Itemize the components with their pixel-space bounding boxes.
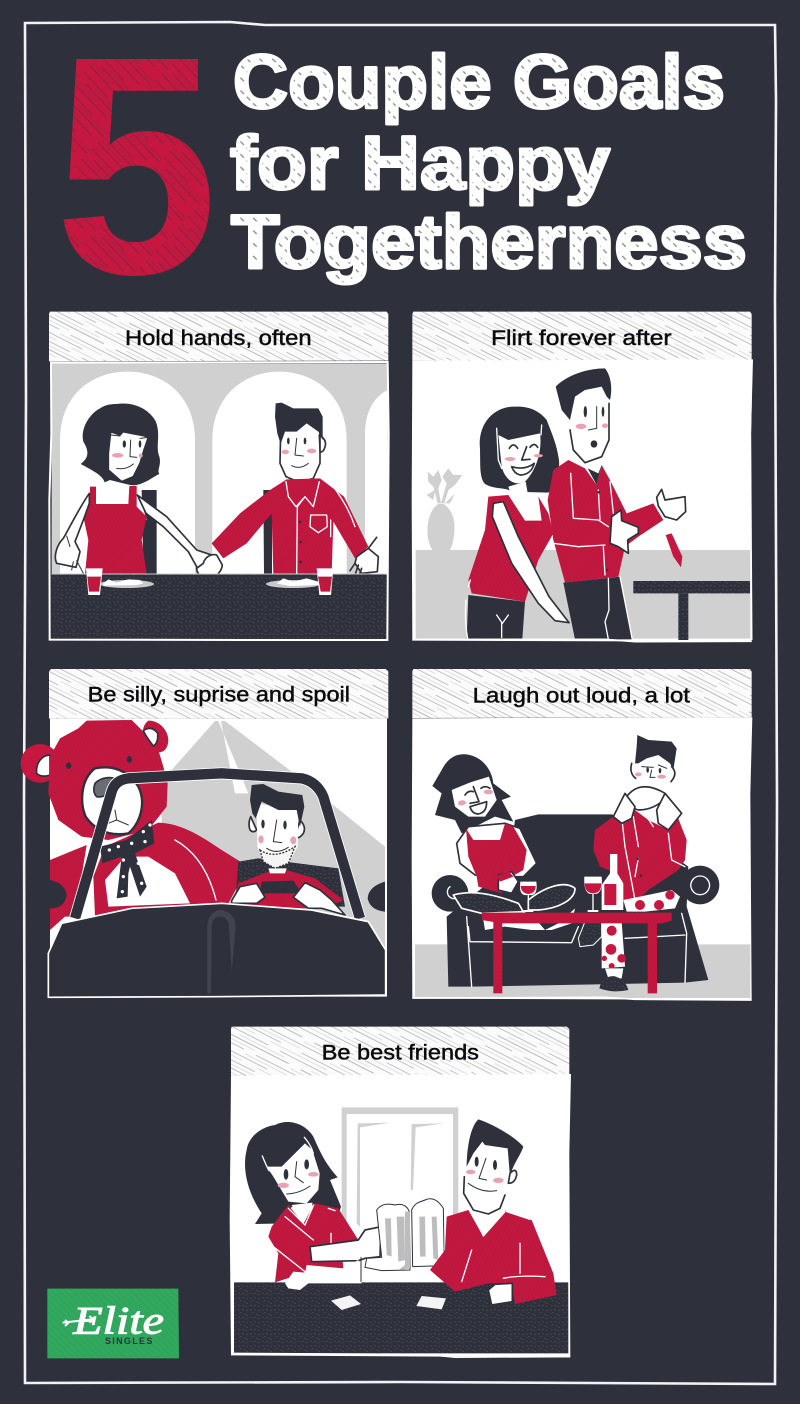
teddy bear <box>21 720 248 930</box>
man <box>430 1119 557 1305</box>
wine glasses and bottle <box>520 854 623 912</box>
room background <box>230 1074 571 1357</box>
logo arrow <box>63 1316 93 1326</box>
panel frame <box>49 362 389 640</box>
panel header <box>412 312 752 361</box>
panel frame <box>232 1280 569 1357</box>
logo subtext: SINGLES <box>105 1336 152 1346</box>
table <box>633 581 750 640</box>
heading: Be best friends <box>322 1039 479 1064</box>
man <box>548 368 686 639</box>
title text: for Happy <box>230 121 610 206</box>
windshield frame inner <box>75 773 360 918</box>
red coffee table <box>482 913 672 993</box>
room background <box>412 717 752 1000</box>
panel: be best friends <box>230 1027 571 1357</box>
panel header <box>412 669 752 718</box>
man with hands on beard <box>578 735 687 991</box>
title text <box>230 40 747 285</box>
logo: Elite Singles <box>47 1289 179 1358</box>
vase and flowers <box>427 468 462 550</box>
heading: Be silly, suprise and spoil <box>88 682 350 707</box>
road scene background <box>50 719 387 997</box>
woman <box>465 407 569 639</box>
panel: hold hands, often <box>49 312 389 640</box>
title text: Couple Goals <box>233 40 725 125</box>
heading: Hold hands, often <box>125 325 312 350</box>
heading: Laugh out loud, a lot <box>473 682 690 707</box>
heading: Flirt forever after <box>491 325 672 350</box>
sofa <box>432 814 719 987</box>
side mirrors <box>50 880 385 912</box>
logo background <box>47 1289 179 1358</box>
car windshield frame <box>75 773 360 918</box>
panel: flirt forever after <box>412 312 753 642</box>
driver <box>232 784 345 915</box>
woman laughing <box>432 754 575 930</box>
table <box>52 568 387 638</box>
panel frame <box>412 997 752 1000</box>
falling pen <box>666 533 682 567</box>
door <box>342 1107 458 1227</box>
wall with arches <box>52 363 388 575</box>
beer mugs <box>365 1199 452 1271</box>
panel header <box>49 669 388 719</box>
title text: Togetherness <box>231 200 747 285</box>
panel header <box>231 1027 569 1076</box>
title: big number 5: 5 <box>54 0 218 340</box>
table <box>234 1282 568 1353</box>
room background <box>412 359 753 642</box>
woman <box>245 1122 381 1290</box>
man <box>197 403 378 578</box>
panel: laugh out loud, a lot <box>412 669 752 1000</box>
logo wordmark: Elite <box>72 1298 164 1342</box>
car hood <box>48 903 386 997</box>
coasters <box>331 1295 446 1310</box>
panel header <box>49 312 388 361</box>
panel: be silly, suprise and spoil <box>21 669 388 997</box>
woman <box>55 403 222 578</box>
panel frame <box>412 360 752 642</box>
